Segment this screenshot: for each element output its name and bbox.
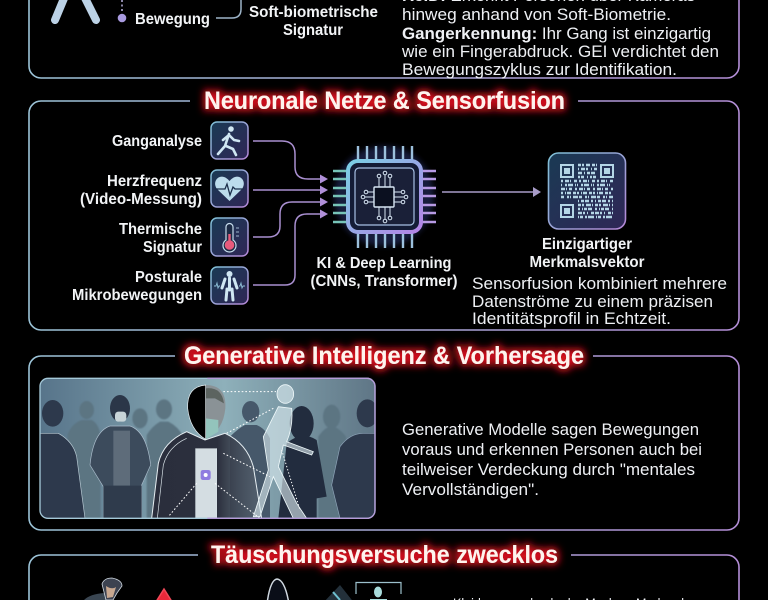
- arrow: chip to feature vector: [442, 187, 541, 197]
- heading: Täuschungsversuche zwecklos: [211, 541, 558, 569]
- icon: thermometer: [211, 218, 248, 256]
- panel: generative intelligence and prediction: [29, 342, 739, 530]
- input labels: Ganganalyse: [112, 133, 202, 150]
- icon: person limping: [84, 578, 122, 600]
- text: sensor fusion description: Identitätsprofil in Echtzeit.: [472, 309, 671, 328]
- icon: posture micro-movements: [211, 267, 248, 304]
- label: AI and deep learning: (CNNs, Transformer): [310, 273, 458, 290]
- text: sensor fusion description: Datenströme zu einem präzisen: [472, 292, 713, 311]
- arrows: sensor inputs into AI chip: [253, 141, 328, 285]
- icon: walking person: [211, 122, 248, 159]
- icon: heart rate: [211, 170, 248, 207]
- text: generative models description: Vervollständigen".: [402, 480, 539, 499]
- icon: AI chip: [333, 146, 436, 248]
- text: re-identification and gait: wie ein Fingerabdruck. GEI verdichtet den: [401, 42, 719, 61]
- label: AI and deep learning: KI & Deep Learning: [316, 255, 452, 272]
- input labels: Herzfrequenz: [107, 173, 202, 190]
- motion dotted marker: [118, 0, 126, 22]
- icon: body scan screen: [322, 582, 401, 600]
- text: sensor fusion description: [472, 274, 727, 328]
- text: re-identification and gait: Bewegungszyklus zur Identifikation.: [402, 60, 677, 79]
- illustration: crowd with partially occluded person and predicted ghost figure: [40, 378, 378, 518]
- label: unique feature vector: [530, 236, 644, 271]
- label: unique feature vector: Merkmalsvektor: [530, 254, 644, 271]
- label: soft-biometric signature: Signatur: [283, 22, 343, 39]
- panel: deception attempts are futile (cropped): [29, 541, 739, 600]
- icon: hooded silhouette: [267, 579, 289, 600]
- input labels: Mikrobewegungen: [72, 287, 202, 304]
- text: generative models description: teilweiser Verdeckung durch "mentales: [402, 460, 695, 479]
- text: generative models description: voraus und erkennen Personen auch bei: [402, 440, 702, 459]
- input labels: [72, 133, 202, 304]
- text: generative models description: [402, 420, 702, 499]
- text: re-identification and gait: hinweg anhand von Soft-Biometrie.: [402, 5, 671, 24]
- text: generative models description: Generative Modelle sagen Bewegungen: [402, 420, 699, 439]
- label: AI and deep learning: [310, 255, 458, 290]
- central man jacket: [152, 432, 262, 518]
- input labels: Posturale: [135, 269, 202, 286]
- label: Bewegung: Bewegung: [135, 11, 210, 28]
- icon: walking figure legs: [55, 0, 96, 20]
- man on far right: [332, 399, 378, 518]
- icon: warning triangle: [154, 589, 174, 600]
- heading: Generative Intelligenz & Vorhersage: [184, 342, 584, 370]
- heading: Neuronale Netze & Sensorfusion: [204, 87, 565, 115]
- dotted prediction lines: [168, 392, 276, 518]
- icon: QR feature vector: [548, 153, 626, 229]
- man on far left: [40, 400, 85, 518]
- label: soft-biometric signature: [249, 4, 378, 39]
- panel: neural networks and sensor fusion: [29, 87, 739, 330]
- text: re-identification and gait: Gangerkennung: Ihr Gang ist einzigartig: [402, 24, 711, 43]
- scan node: [201, 470, 211, 480]
- panel: gait recognition (top, cropped): [29, 0, 739, 79]
- text: re-identification and gait: [401, 0, 719, 79]
- dark woman behind ghost: [278, 406, 327, 518]
- background crowd: [67, 399, 346, 518]
- label: unique feature vector: Einzigartiger: [542, 236, 632, 253]
- text: sensor fusion description: Sensorfusion kombiniert mehrere: [472, 274, 727, 293]
- input labels: Thermische: [119, 221, 202, 238]
- connector: Bewegung to signature: [216, 0, 241, 18]
- label: soft-biometric signature: Soft-biometrische: [249, 4, 378, 21]
- ghost predicted figure: [253, 385, 313, 518]
- input labels: (Video-Messung): [80, 191, 202, 208]
- masked man: [90, 395, 151, 518]
- central man face, half scanned: [206, 385, 225, 439]
- input labels: Signatur: [143, 239, 202, 256]
